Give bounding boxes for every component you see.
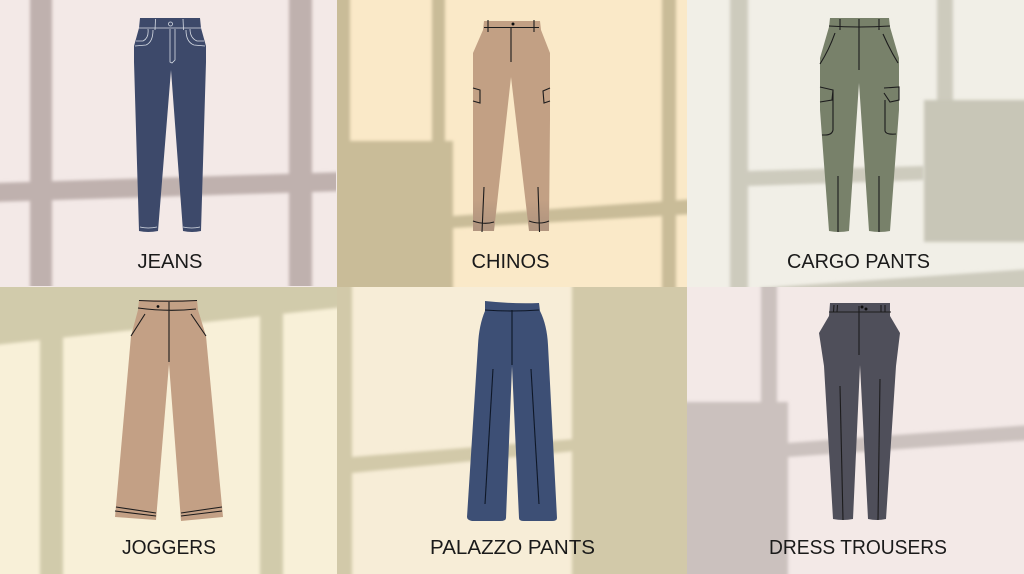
label: joggers: JOGGERS: [122, 536, 216, 559]
panel: chinos: [330, 0, 695, 296]
icon: palazzo pants garment: [467, 301, 557, 521]
panel background: jeans: [0, 0, 337, 287]
panel background: palazzo pants: [337, 287, 687, 574]
window shadow: palazzo pants: [330, 280, 697, 574]
panel background: chinos: [337, 0, 687, 287]
panel: dress trousers: [680, 280, 1024, 574]
icon: joggers garment: [115, 300, 223, 521]
window shadow: jeans: [0, 0, 345, 295]
window shadow: joggers: [0, 280, 345, 574]
label: dress trousers: DRESS TROUSERS: [769, 536, 947, 559]
window shadow: dress trousers: [680, 280, 1024, 574]
label: cargo pants: CARGO PANTS: [787, 250, 930, 273]
panel: joggers: [0, 280, 345, 574]
panel: palazzo pants: [330, 280, 697, 574]
icon: cargo pants garment: [820, 18, 899, 232]
panel background: dress trousers: [687, 287, 1024, 574]
window shadow: cargo pants: [730, 0, 1024, 295]
panel: cargo pants: [687, 0, 1024, 295]
label: jeans: JEANS: [138, 250, 202, 273]
panel background: joggers: [0, 287, 337, 574]
window shadow: chinos: [330, 0, 695, 296]
panel background: cargo pants: [687, 0, 1024, 287]
icon: jeans garment: [134, 18, 206, 232]
label: palazzo pants: PALAZZO PANTS: [430, 536, 595, 559]
icon: dress trousers garment: [819, 303, 900, 520]
panel: jeans: [0, 0, 345, 295]
label: chinos: CHINOS: [472, 250, 550, 273]
icon: chinos garment: [473, 20, 550, 232]
